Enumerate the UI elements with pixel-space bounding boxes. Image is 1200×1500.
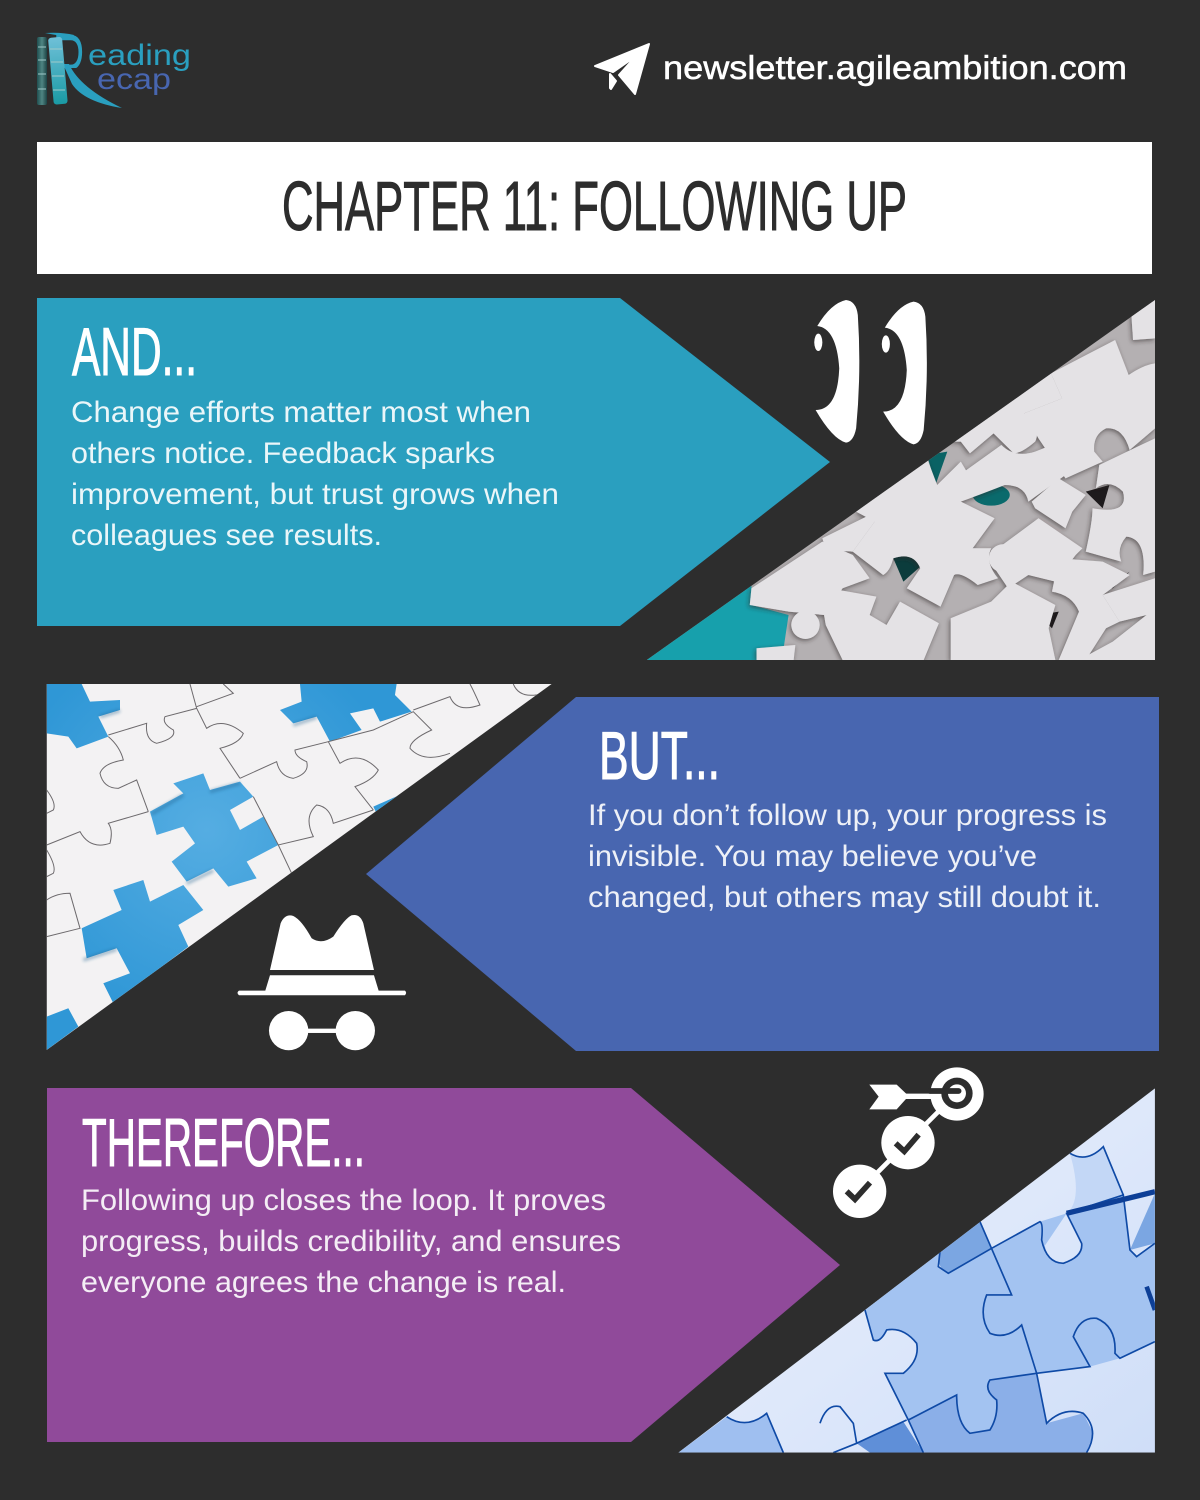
text: BUT body xyxy=(588,799,1107,914)
text: THEREFORE body: progress, builds credibility, and ensures xyxy=(81,1225,621,1258)
title banner xyxy=(37,142,1152,274)
logo: Reading Recap xyxy=(37,32,189,108)
icon: books xyxy=(37,37,68,105)
heading: THEREFORE: THEREFORE... xyxy=(82,1105,365,1181)
icon: incognito hat and glasses xyxy=(237,915,406,1050)
text: THEREFORE body: Following up closes the loop. It proves xyxy=(81,1184,606,1217)
image: white puzzle on blue xyxy=(40,680,553,1053)
logo word: eading: eading xyxy=(88,39,191,72)
icon: target with checkmarks xyxy=(833,1067,984,1218)
text: THEREFORE body: everyone agrees the change is real. xyxy=(81,1266,566,1299)
text: AND body: Change efforts matter most when xyxy=(71,396,531,429)
panel: AND xyxy=(37,298,830,626)
text: AND body xyxy=(71,396,559,552)
text: AND body: others notice. Feedback sparks xyxy=(71,437,495,470)
heading: AND: AND... xyxy=(72,314,197,390)
image: blue puzzle xyxy=(670,1060,1157,1453)
panel: THEREFORE xyxy=(47,1088,840,1442)
website url: newsletter.agileambition.com xyxy=(663,49,1127,86)
logo word: ecap: ecap xyxy=(97,63,171,96)
text: THEREFORE body xyxy=(81,1184,621,1299)
logo flourish xyxy=(45,33,122,108)
text: BUT body: If you don’t follow up, your progress is xyxy=(588,799,1107,832)
icon: paper plane xyxy=(595,44,649,94)
text: BUT body: changed, but others may still doubt it. xyxy=(588,881,1101,914)
icon: eyes xyxy=(814,300,927,444)
text: BUT body: invisible. You may believe you’ve xyxy=(588,840,1037,873)
text: AND body: improvement, but trust grows when xyxy=(71,478,559,511)
panel: BUT xyxy=(366,697,1159,1051)
text: AND body: colleagues see results. xyxy=(71,519,382,552)
heading: BUT: BUT... xyxy=(599,718,720,794)
logo letter R: R xyxy=(52,16,86,116)
image: white puzzle pieces xyxy=(640,295,1157,662)
